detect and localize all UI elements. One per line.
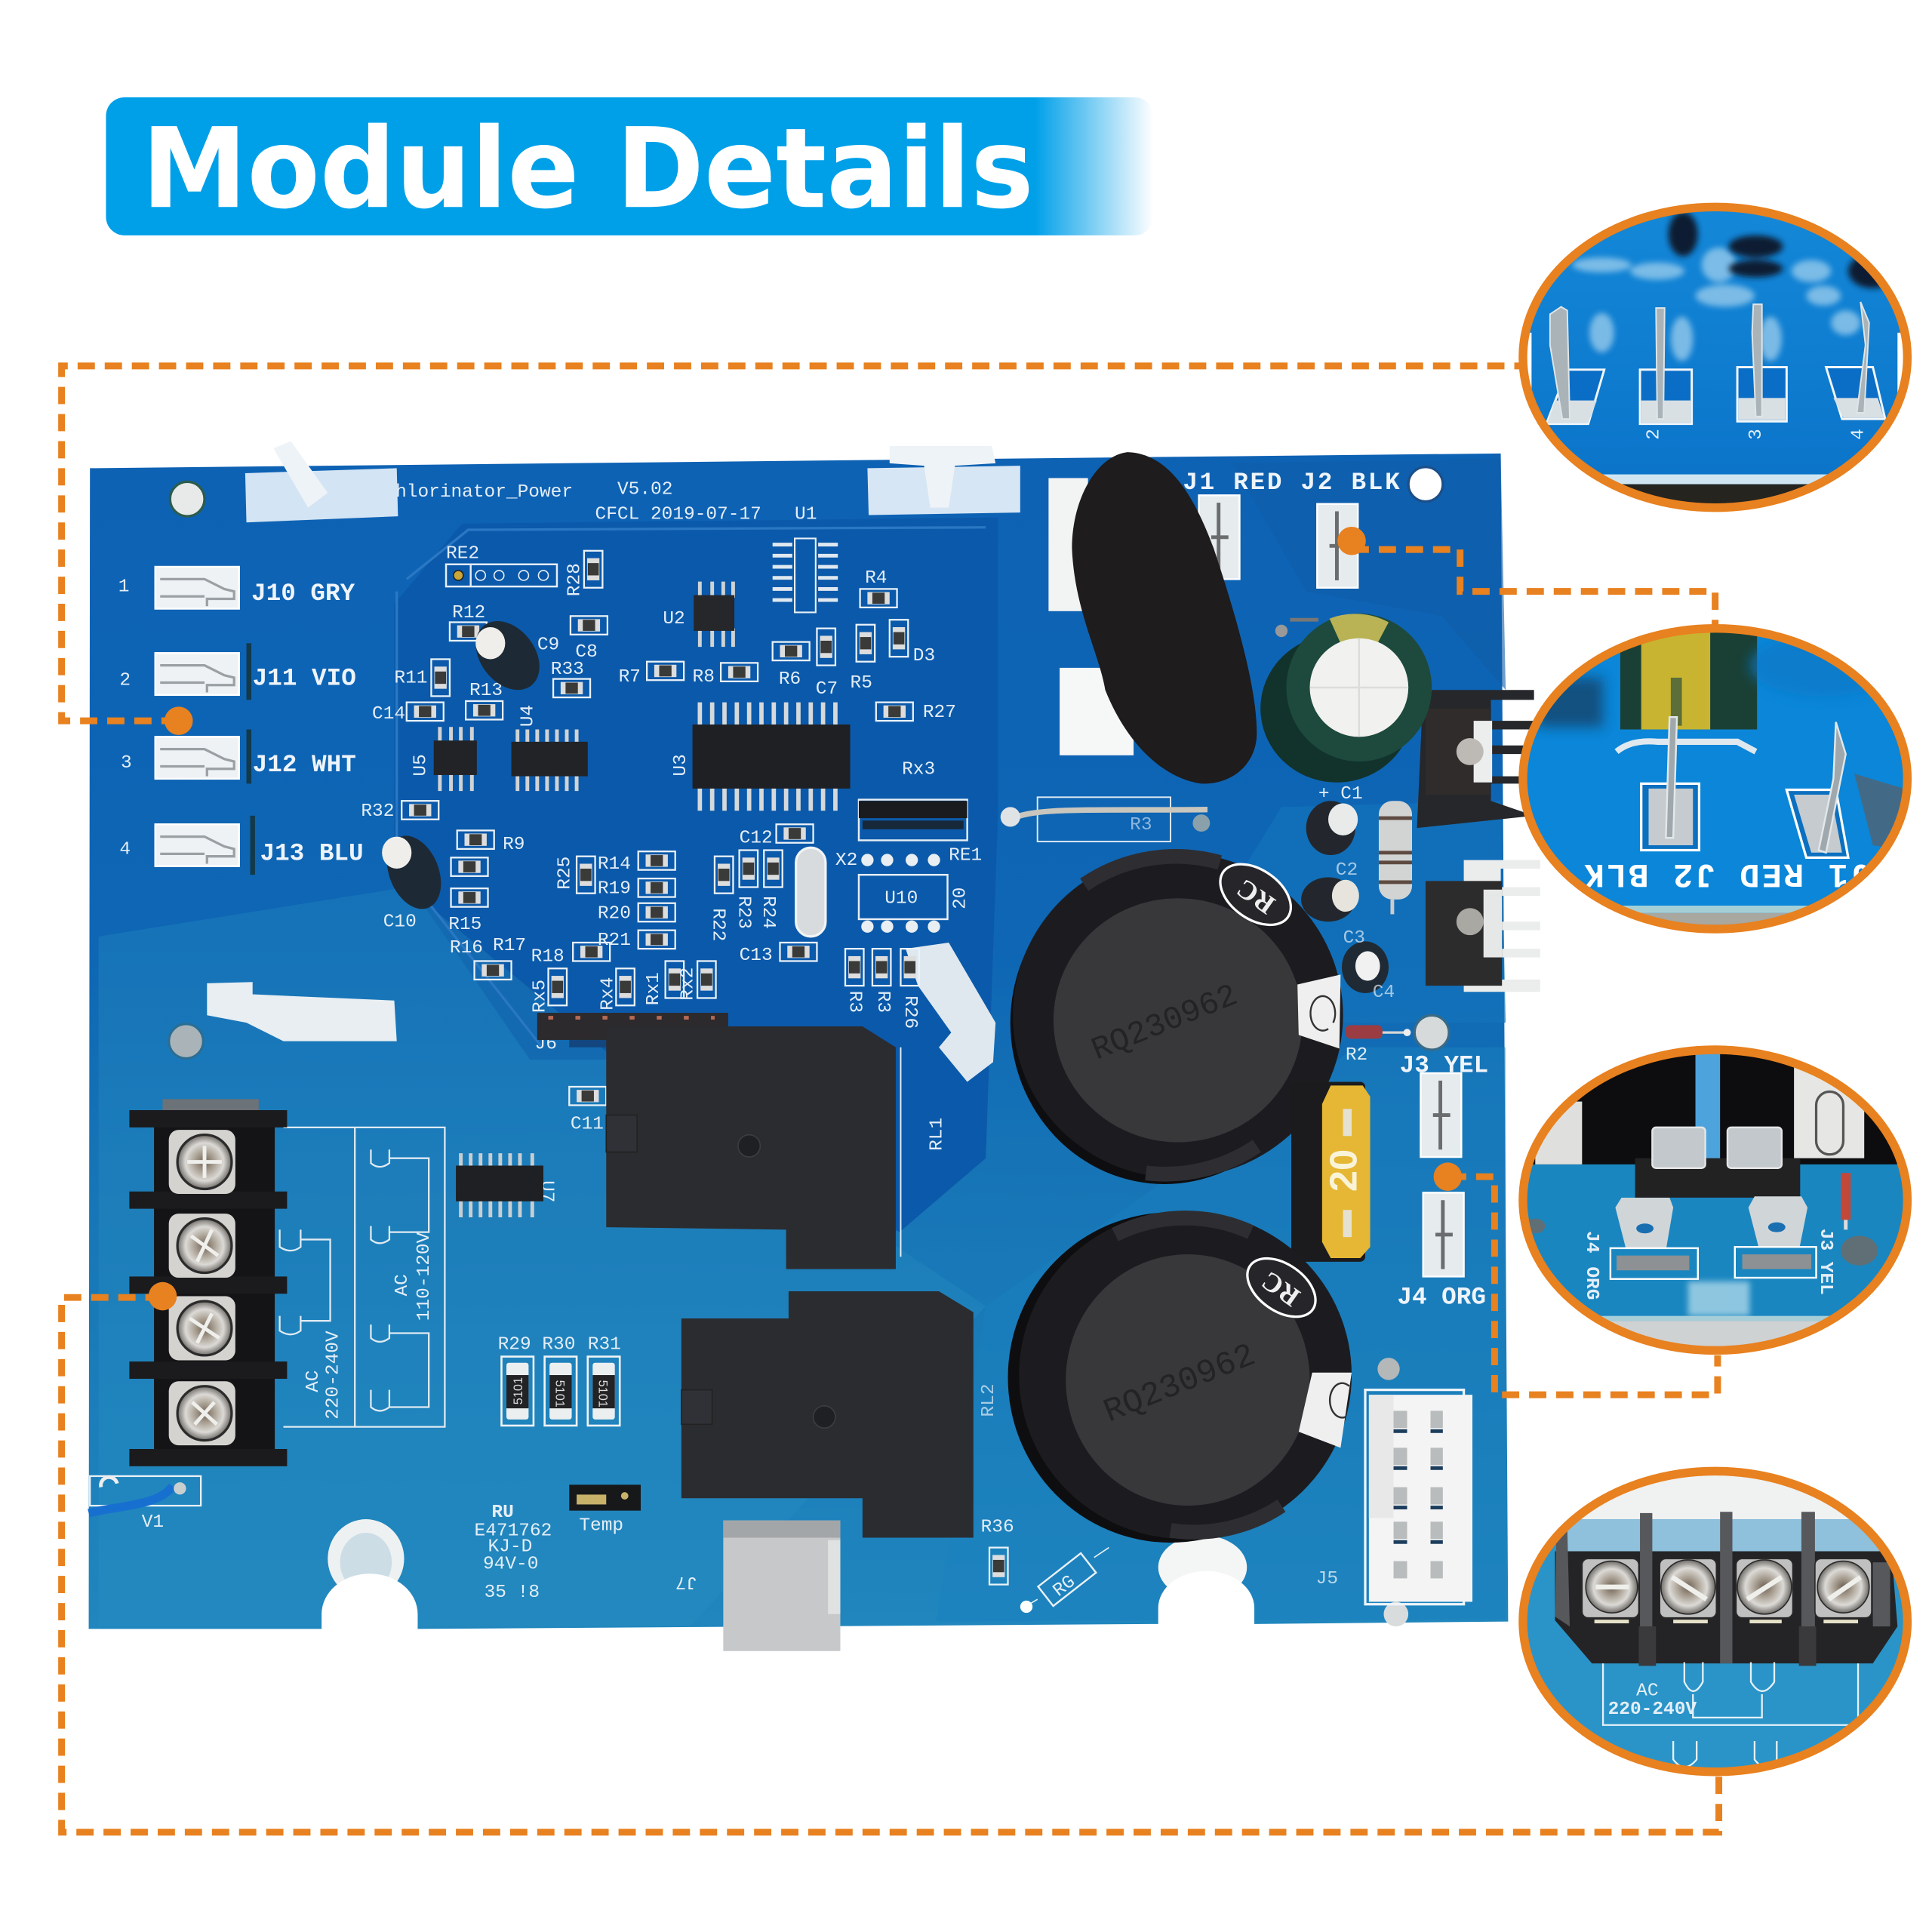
IC U5 [434,727,477,791]
component silkscreen labels: R26 [900,995,920,1029]
power resistors R29 R30 R31: 5101 [512,1377,525,1404]
varistor pads [1048,478,1134,755]
power resistors R29 R30 R31: 5101 [595,1380,609,1407]
terminal block [129,1099,287,1466]
component silkscreen labels: C7 [816,679,838,700]
detail lens: terminal block: AC [1636,1681,1659,1702]
lens ring 3 [1523,1050,1907,1350]
spade connectors J10-J13: 1 [118,577,129,598]
detail lens: terminal block [1519,1467,1914,1776]
heat sink white [1426,860,1540,992]
fuse 20A [1291,1081,1371,1262]
labels J3 J4: J4 ORG [1397,1283,1486,1311]
component silkscreen labels: X2 [835,851,857,871]
title text: Module Details [142,104,1034,233]
detail lens: terminals 1-4: 2 [1644,429,1665,440]
component silkscreen labels: R36 [981,1517,1014,1537]
IC U4 [512,730,588,791]
small capacitors C1 to C4: C3 [1343,928,1365,949]
UL certification marks: KJ-D [488,1537,532,1558]
large capacitor top: RC [1231,873,1281,920]
circuit board: V5.02 [617,480,672,500]
small capacitors C1 to C4: + C1 [1318,784,1363,804]
component silkscreen labels: Rx3 [902,759,935,780]
large capacitor bottom [1008,1211,1352,1543]
detail lens: terminals 1-4: 4 [1849,429,1869,440]
component silkscreen labels: C13 [740,946,773,966]
leader 3 [1449,1177,1718,1395]
mounting notches [321,1519,1254,1630]
UL certification marks: RU [491,1503,514,1523]
power resistors R29 R30 R31: R31 [588,1335,621,1355]
component silkscreen labels: C11 [571,1115,604,1135]
spade connectors J10-J13: 3 [121,753,132,774]
lens ring 1 [1523,207,1907,508]
fuse 20A: 20 [1322,1149,1365,1192]
component silkscreen labels: R4 [865,568,887,589]
SMD resistors and capacitors [401,551,1008,1585]
large capacitor top: RQ230962 [1087,977,1243,1069]
component silkscreen labels: U2 [663,609,685,629]
component silkscreen labels: R17 [493,936,526,956]
component silkscreen labels: R27 [923,703,956,723]
UL certification marks [475,1503,552,1603]
large capacitor bottom: RQ230962 [1099,1337,1261,1432]
component silkscreen labels: R28 [565,563,585,596]
nylon standoff clips [207,441,1020,1081]
small capacitors C1 to C4: C2 [1336,860,1358,881]
detail lens: terminals 1-4 [1509,203,1916,521]
board title silkscreen: hlorinator_Power [395,482,573,503]
component silkscreen labels: R14 [598,854,631,875]
component silkscreen labels: R6 [779,669,801,690]
component silkscreen labels: R20 [598,903,631,924]
detail lens: J4 and J3 terminals: J4 [1581,1231,1601,1253]
title banner [106,97,1153,235]
resistor R3 wire [1001,797,1210,841]
power resistors R29 R30 R31: R29 [498,1335,531,1355]
component silkscreen labels: R21 [598,931,631,951]
component silkscreen labels: R2 [1346,1045,1367,1066]
component silkscreen labels: 20 [950,888,971,909]
IC U2 [694,582,734,647]
pin header J6 [537,1013,730,1048]
header RE2 [446,544,557,586]
component silkscreen labels: C9 [537,635,559,655]
resistor RG [1020,1548,1109,1613]
spade connectors J10-J13: 4 [119,839,131,860]
detail lens: J4 and J3 terminals [1515,1046,1922,1358]
board label J1 RED J2 BLK: J1 RED J2 BLK [1183,469,1400,497]
leader 2 [1352,549,1715,629]
component silkscreen labels: Rx4 [598,977,618,1011]
inner trace region [394,518,998,1232]
component silkscreen labels: R32 [361,801,394,822]
AC voltage silkscreen: 220-240V [323,1331,343,1420]
relay RL2 [681,1291,974,1538]
component silkscreen labels: R12 [452,603,485,623]
temp jumper [569,1484,641,1537]
component silkscreen labels: U1 [795,504,817,525]
small electrolytic capacitor C10 [377,828,451,917]
spade connectors J10-J13: J13 BLU [260,840,364,868]
large capacitor top [1011,852,1343,1184]
labels J3 J4 [1397,1051,1488,1311]
spade connectors J10-J13 [118,567,364,875]
detail lens: J4 and J3 terminals: ORG [1581,1266,1601,1300]
relay RL1 [606,1026,900,1269]
component silkscreen labels: R13 [469,681,503,701]
circuit board [89,441,1540,1651]
component silkscreen labels: U7 [536,1180,556,1202]
small capacitors C1 to C4 [1301,784,1395,1003]
component silkscreen labels: R11 [394,668,428,688]
component silkscreen labels: R3 [844,991,865,1013]
UL certification marks: E471762 [475,1521,552,1541]
jumper wire V1 [89,1476,201,1513]
IC U7 [456,1153,543,1217]
leader 4 [62,1297,1719,1832]
AC voltage silkscreen: AC [303,1371,324,1392]
crystal X2 [796,848,826,937]
UL certification marks: 35 !8 [485,1583,540,1603]
detail lens: J2 and J1 terminals: J1 RED J2 BLK [1584,854,1870,892]
component silkscreen labels: J7 [675,1571,697,1592]
UL certification marks: 94V-0 [483,1554,538,1574]
spade connectors J10-J13: J11 VIO [253,665,356,693]
power resistor [1379,801,1412,914]
spade connector J2 [1317,504,1358,588]
mounting hole behind bottom capacitor [1158,1535,1247,1599]
component silkscreen labels: R5 [851,673,872,694]
varistor [1072,452,1257,783]
component silkscreen labels: R22 [707,908,728,941]
resistor R3 wire: R3 [1130,815,1152,835]
component silkscreen labels: J5 [1316,1569,1338,1589]
spade connector J4 [1423,1192,1464,1276]
component silkscreen labels: R25 [555,857,575,890]
component silkscreen labels: C10 [383,912,417,933]
component silkscreen labels: R16 [450,938,483,958]
detail lens: terminals 1-4: 3 [1746,429,1767,440]
component silkscreen labels [142,504,1385,1592]
power resistors R29 R30 R31: 5101 [552,1380,566,1407]
component silkscreen labels: D2 [1364,629,1385,651]
spade connectors J10-J13: J12 WHT [253,751,356,779]
small electrolytic capacitor C9 [463,609,552,703]
dashed leader lines [62,366,1719,1832]
component silkscreen labels: Rx5 [531,980,551,1013]
component silkscreen labels: D3 [913,646,935,666]
circuit board: CFCL 2019-07-17 [595,504,761,525]
large capacitor bottom: RC [1256,1266,1306,1312]
diode R2 [1346,1025,1411,1038]
leader dots [149,527,1462,1310]
labels J3 J4: J3 YEL [1400,1051,1488,1079]
component silkscreen labels: R23 [734,896,754,929]
lens ring 4 [1523,1471,1907,1772]
footprint U10 and RE1: U10 [884,889,918,909]
header RE2: RE2 [446,544,479,565]
component silkscreen labels: RE1 [949,846,982,866]
component silkscreen labels: R19 [598,879,631,900]
component silkscreen labels: R33 [551,660,584,680]
detail lens: J4 and J3 terminals: J3 YEL [1815,1229,1835,1295]
IC U3 [693,703,851,811]
spade connector J3 [1420,1073,1461,1157]
lens ring 2 [1523,629,1907,929]
connector J5 [1365,1390,1472,1604]
component silkscreen labels: Rx2 [678,968,699,1001]
component silkscreen labels: U5 [411,754,431,777]
component silkscreen labels: C14 [372,704,405,724]
connector J7 [723,1521,840,1651]
component silkscreen labels: R3 [872,991,893,1013]
spade connector J1 [1199,495,1239,579]
AC voltage silkscreen [280,1128,445,1427]
temp jumper: Temp [579,1516,623,1537]
component silkscreen labels: R7 [619,667,641,688]
component silkscreen labels: RL1 [927,1118,947,1151]
component silkscreen labels: U3 [671,754,691,777]
component silkscreen labels: R24 [758,896,778,929]
detail lens: J2 and J1 terminals [1509,625,1916,937]
green electrolytic capacitor [1260,614,1432,783]
component silkscreen labels: R9 [503,835,525,855]
leader 1 [62,366,1523,721]
AC voltage silkscreen: 110-120V [414,1232,435,1321]
resistor RG: RG [1050,1572,1080,1601]
power resistors R29 R30 R31: R30 [542,1335,575,1355]
component silkscreen labels: R15 [448,915,481,935]
component silkscreen labels: U4 [518,705,538,727]
spade connectors J10-J13: 2 [119,671,131,691]
component silkscreen labels: V1 [142,1512,164,1533]
mounting holes [169,467,1449,1626]
component silkscreen labels: Rx1 [644,972,664,1005]
component silkscreen labels: J6 [535,1034,557,1054]
heat sink black [1417,690,1537,828]
small capacitors C1 to C4: C4 [1373,983,1395,1003]
IC U1 footprint [773,538,838,612]
AC voltage silkscreen: AC [392,1274,413,1297]
component silkscreen labels: C8 [575,642,598,663]
component silkscreen labels: C12 [740,829,773,849]
detail lens: terminal block: 220-240V [1608,1700,1697,1720]
component silkscreen labels: RL2 [979,1383,999,1417]
component silkscreen labels: R18 [531,946,565,967]
spade connectors J10-J13: J10 GRY [251,580,355,608]
footprint U10 and RE1 [859,800,968,933]
power resistors R29 R30 R31 [498,1335,621,1426]
component silkscreen labels: R8 [693,667,715,688]
